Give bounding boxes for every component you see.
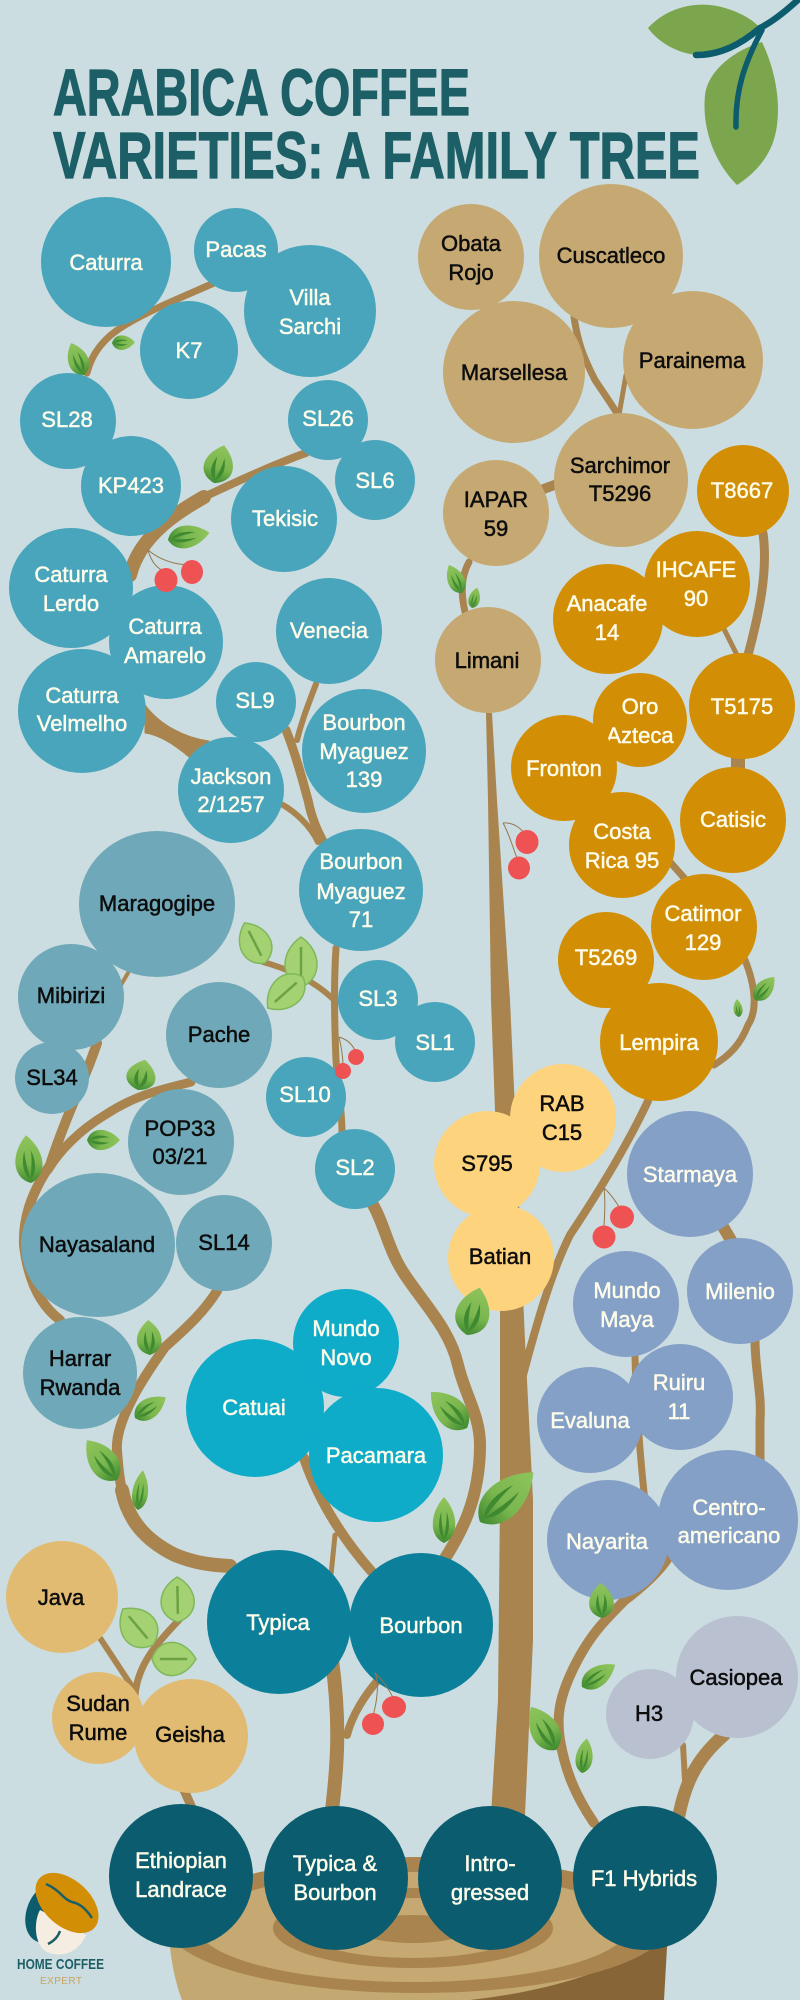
node: Mundo Maya [573,1251,679,1357]
node: K7 [140,301,238,399]
glossy leaves [13,335,781,1774]
node: Limani: Limani [455,648,519,673]
node: Pache [166,982,272,1088]
node: Geisha [134,1679,248,1793]
node: KP423 [81,436,181,536]
panel: Typica-derived varieties [15,831,272,1429]
node: SL34 [15,1042,89,1114]
node: Tekisic [231,466,337,572]
icon: coffee bean [24,1861,110,1954]
node: Bourbon Myaguez 139 [302,689,426,813]
node: Java: Java [38,1585,85,1610]
node: Typica and Bourbon [264,1806,408,1950]
node: Starmaya [627,1111,753,1237]
node: Pacas: Pacas [205,237,267,262]
node: Villa Sarchi [244,245,376,377]
node: SL2: SL2 [335,1155,375,1180]
node: Caturra Amarelo: Amarelo [124,643,206,668]
node: Catimor 129: Catimor [664,901,742,926]
node: IHCAFE 90: IHCAFE [656,557,736,582]
node: T5175: T5175 [711,694,773,719]
node: Obata Rojo [418,204,524,310]
node: H3 [606,1669,694,1759]
node: Costa Rica 95: Costa [593,819,651,844]
node: Centroamericano: Centro- [692,1495,766,1520]
node: IAPAR 59: 59 [484,516,508,541]
node: SL6 [335,440,415,520]
node: H3: H3 [635,1701,663,1726]
node: Jackson 2/1257 [178,737,284,843]
node: RAB C15 [510,1064,616,1172]
tree stump pot [167,1857,668,2000]
node: Bourbon Myaguez 139: Myaguez [319,739,409,764]
node: Batian [448,1205,554,1311]
node: Bourbon: Bourbon [379,1613,463,1638]
node: Limani [435,607,541,713]
node: Parainema: Parainema [639,348,746,373]
node: Sudan Rume [52,1672,144,1764]
node: Bourbon [349,1553,493,1697]
panel: Sarchimor family [418,184,763,713]
node: SL14: SL14 [198,1230,250,1255]
node: Marsellesa: Marsellesa [461,360,568,385]
main trunk [486,713,533,1815]
node: Ruiru 11: 11 [668,1399,690,1424]
node: Bourbon Myaguez 71: Bourbon [319,849,403,874]
panel: other F1 hybrids [606,1616,798,1759]
node: Pacas [194,208,278,292]
node: Sarchimor T5296 [554,413,688,547]
node: Ethiopian Landrace [109,1804,253,1948]
panel: Bourbon-derived varieties [9,197,475,1209]
node: SL28: SL28 [41,407,93,432]
node: Costa Rica 95 [569,792,675,898]
node: Obata Rojo: Rojo [448,260,494,285]
node: Catisic: Catisic [700,807,766,832]
node: Catimor 129 [651,874,757,980]
node: T5175 [689,653,795,759]
node: Fronton: Fronton [526,756,602,781]
node: Pache: Pache [188,1022,250,1047]
flat leaves [109,916,317,1676]
icon: top right leaves and stem [648,0,800,185]
node: POP33 03/21: POP33 [145,1116,215,1141]
node: Mundo Novo [293,1289,399,1397]
node: Milenio [687,1238,793,1344]
panel: four root groups [109,1804,717,1950]
node: Typica and Bourbon: Typica & [293,1851,378,1876]
node: Casiopea: Casiopea [690,1665,783,1690]
node: K7: K7 [176,338,202,363]
node: Ruiru 11: Ruiru [653,1370,705,1395]
logo: Home Coffee Expert: EXPERT [40,1976,82,1987]
node: Venecia [276,578,382,684]
node: Caturra Velmelho: Velmelho [37,711,127,736]
panel: Timor hybrids [434,1064,616,1311]
node: Catuai: Catuai [222,1395,286,1420]
node: Lempira [600,983,718,1101]
node: Ethiopian Landrace: Ethiopian [135,1848,227,1873]
node: T5269 [558,912,654,1008]
node: Ruiru 11 [627,1344,733,1450]
node: T5269: T5269 [575,945,637,970]
node: Sarchimor T5296: Sarchimor [570,453,670,478]
node: SL3: SL3 [358,986,398,1011]
node: Cuscatleco: Cuscatleco [557,243,665,268]
node: Nayasaland: Nayasaland [39,1232,155,1257]
node: Evaluna: Evaluna [550,1408,631,1433]
node: SL9: SL9 [235,688,275,713]
node: SL1: SL1 [415,1030,455,1055]
node: Lempira: Lempira [619,1030,700,1055]
node: Caturra Lerdo: Lerdo [43,591,99,616]
node: Anacafe 14: 14 [595,620,619,645]
node: Bourbon Myaguez 71 [299,829,423,951]
node: Ethiopian Landrace: Landrace [135,1877,227,1902]
node: Bourbon Myaguez 139: 139 [346,767,382,792]
node: Harrar Rwanda: Harrar [49,1346,111,1371]
node: Milenio: Milenio [705,1279,775,1304]
node: SL28 [20,373,116,469]
node: Batian: Batian [469,1244,531,1269]
node: SL34: SL34 [26,1065,78,1090]
node: Pacamara [309,1388,443,1522]
node: Casiopea [676,1616,798,1738]
node: Maragogipe [79,831,235,977]
node: Nayasaland [21,1173,175,1317]
branches [24,283,765,1823]
node: Harrar Rwanda: Rwanda [40,1375,121,1400]
node: IAPAR 59 [443,460,549,566]
node: SL10: SL10 [279,1082,331,1107]
node: Marsellesa [443,301,585,443]
node: Evaluna [537,1367,643,1473]
node: Bourbon Myaguez 71: Myaguez [316,879,406,904]
node: Anacafe 14: Anacafe [567,591,647,616]
node: Maragogipe: Maragogipe [99,891,215,916]
node: SL26 [288,380,368,460]
node: T8667: T8667 [711,478,773,503]
node: Centroamericano [658,1450,798,1590]
node: SL3 [338,960,418,1040]
node: Cuscatleco [539,184,683,328]
node: IHCAFE 90: 90 [684,586,708,611]
node: SL26: SL26 [302,406,354,431]
node: Caturra [41,197,171,327]
node: Sudan Rume: Sudan [66,1691,130,1716]
node: Nayarita [547,1480,669,1600]
node: S795: S795 [461,1151,513,1176]
node: Caturra Lerdo: Caturra [34,562,108,587]
node: Venecia: Venecia [290,618,369,643]
node: Nayarita: Nayarita [566,1529,649,1554]
node: POP33 03/21 [128,1089,234,1195]
node: Catisic [680,767,786,873]
node: Fronton [511,715,617,821]
node: SL9 [216,662,296,742]
node: POP33 03/21: 03/21 [152,1144,208,1169]
node: SL10 [266,1057,346,1137]
node: Anacafe 14 [553,564,663,674]
logo: Home Coffee Expert: HOME COFFEE [17,1956,104,1973]
node: Caturra Velmelho: Caturra [45,683,119,708]
node: Pacamara: Pacamara [326,1443,427,1468]
node: Mundo Novo: Novo [320,1345,372,1370]
node: Sudan Rume: Rume [69,1720,127,1745]
node: Mundo Maya: Maya [600,1307,655,1332]
node: Caturra: Caturra [69,250,143,275]
node: Villa Sarchi: Sarchi [279,314,341,339]
node: Tekisic: Tekisic [252,506,318,531]
node: Harrar Rwanda [23,1317,137,1429]
node: Oro Azteca: Oro [622,694,658,719]
panel: Ethiopian landrace varieties [6,1541,248,1793]
panel: Typica and Bourbon [207,1550,493,1697]
cherries [148,550,634,1735]
node: RAB C15: C15 [542,1120,582,1145]
node: RAB C15: RAB [539,1091,585,1116]
node: Starmaya: Starmaya [643,1162,738,1187]
node: Bourbon Myaguez 71: 71 [349,907,373,932]
node: Mibirizi: Mibirizi [37,983,105,1008]
node: SL14 [176,1195,272,1291]
panel: Catimor family [511,445,795,1101]
node: F1 Hybrids: F1 Hybrids [591,1866,697,1891]
node: Bourbon Myaguez 139: Bourbon [322,710,406,735]
node: Caturra Lerdo [9,528,133,648]
node: F1 Hybrids [573,1806,717,1950]
node: Oro Azteca [593,673,687,767]
node: Typica and Bourbon: Bourbon [293,1880,377,1905]
node: SL1 [395,1002,475,1082]
node: IHCAFE 90 [644,531,750,637]
title [53,55,700,192]
node: Catimor 129: 129 [685,930,721,955]
node: Typica: Typica [246,1610,311,1635]
node: Jackson 2/1257: 2/1257 [197,792,265,817]
node: Caturra Amarelo [109,585,223,699]
node: SL2 [315,1129,395,1209]
title: ARABICA COFFEE [53,55,470,129]
node: Obata Rojo: Obata [441,231,502,256]
node: Caturra Velmelho [18,649,146,773]
node: KP423: KP423 [98,473,164,498]
node: S795 [434,1111,540,1217]
node: Villa Sarchi: Villa [289,285,331,310]
node: Geisha: Geisha [155,1722,226,1747]
logo: Home Coffee Expert [17,1861,110,1987]
node: Costa Rica 95: Rica 95 [585,848,659,873]
node: Jackson 2/1257: Jackson [191,764,271,789]
panel: Typica-Bourbon crosses [186,1289,443,1522]
node: Mundo Novo: Mundo [312,1316,380,1341]
node: Mibirizi [18,944,124,1050]
node: IAPAR 59: IAPAR [464,487,528,512]
node: Introgressed: gressed [451,1880,529,1905]
node: SL6: SL6 [355,468,395,493]
node: Oro Azteca: Azteca [606,723,674,748]
node: Caturra Amarelo: Caturra [128,614,202,639]
node: T8667 [697,445,789,537]
node: Introgressed: Intro- [464,1851,516,1876]
node: Mundo Maya: Mundo [593,1278,661,1303]
node: Parainema [623,291,763,429]
node: Typica [207,1550,351,1694]
node: Introgressed [418,1806,562,1950]
node: Java [6,1541,118,1653]
node: Centroamericano: americano [678,1523,780,1548]
node: Sarchimor T5296: T5296 [589,481,651,506]
node: Catuai [186,1339,324,1477]
panel: F1 hybrid varieties [537,1111,798,1600]
